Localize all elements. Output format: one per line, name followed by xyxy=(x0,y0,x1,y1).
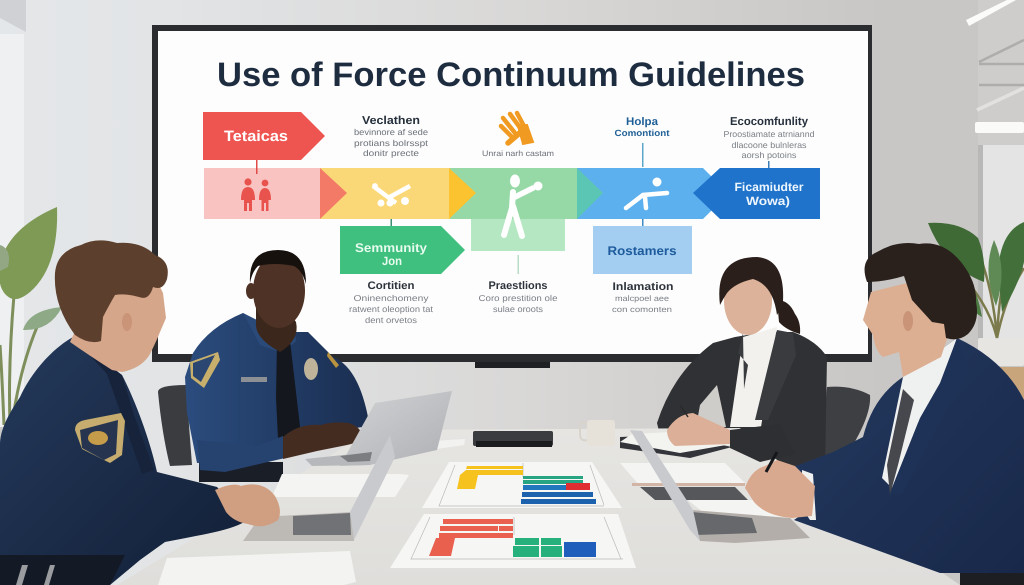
text block: Praestlions: sulae oroots xyxy=(493,304,543,314)
arrow: Tetaicas: Tetaicas xyxy=(224,128,288,145)
chair: centre officer xyxy=(158,385,192,466)
document chart: bottom xyxy=(390,514,636,568)
stacked documents right xyxy=(433,439,790,518)
table xyxy=(117,428,960,585)
sleeve and hands: woman xyxy=(667,405,795,462)
text block: Cortitien xyxy=(349,280,434,325)
forearm and hands: centre officer xyxy=(197,422,363,472)
text block: Cortitien: Oninenchomeny xyxy=(354,293,429,303)
text block: Inlamation: Inlamation xyxy=(612,281,674,293)
arrow: Ficamiudter Wowa: Wowa) xyxy=(746,194,790,208)
box: Rostamers: Rostamers xyxy=(608,244,677,258)
continuum band xyxy=(204,168,722,219)
text block: Cortitien: ratwent oleoption tat xyxy=(349,304,434,314)
laptop: front left xyxy=(243,435,395,541)
icon: walking figure xyxy=(504,175,542,236)
arrow: Semmunity Jon xyxy=(340,219,465,274)
person: woman xyxy=(657,257,827,475)
person: left officer xyxy=(0,240,280,585)
text block: Praestlions xyxy=(478,280,558,314)
notebook xyxy=(473,431,553,447)
chair: woman xyxy=(820,387,870,465)
ceiling lights xyxy=(966,0,1024,133)
document chart: top xyxy=(422,462,622,508)
text block: Veclathen: donitr precte xyxy=(363,148,419,158)
plant: left xyxy=(0,207,62,450)
text block: Inlamation: malcpoel aee xyxy=(615,294,670,303)
text block: Holpa Comontiont xyxy=(614,116,670,167)
person: right man xyxy=(745,243,1024,585)
text block: Inlamation: con comonten xyxy=(612,305,672,314)
notebook: woman xyxy=(620,432,732,458)
caption: hands: Unrai narh castam xyxy=(482,149,554,158)
text block: Praestlions: Coro prestition ole xyxy=(478,293,558,303)
arrow: Tetaicas xyxy=(203,112,325,174)
text block: Cortitien: dent orvetos xyxy=(365,315,417,325)
icon: two people xyxy=(241,178,271,211)
loose papers left xyxy=(272,474,409,497)
title: Use of Force Continuum Guidelines xyxy=(217,56,805,94)
text block: Veclathen: protians bolrsspt xyxy=(354,138,429,148)
arrow: Ficamiudter Wowa: Ficamiudter xyxy=(734,180,804,194)
box: Rostamers xyxy=(593,219,692,274)
coffee mug xyxy=(580,420,615,446)
green lower box xyxy=(471,219,565,274)
text block: Holpa Comontiont: Comontiont xyxy=(614,128,670,138)
text block: Veclathen xyxy=(354,115,429,158)
text block: Ecocomfunlity: Ecocomfunlity xyxy=(730,116,809,128)
text block: Ecocomfunlity: aorsh potoins xyxy=(742,150,796,160)
icon: orange hands xyxy=(501,113,533,144)
wall screen xyxy=(152,25,872,368)
person: centre officer xyxy=(185,250,368,482)
text block: Praestlions: Praestlions xyxy=(488,280,548,292)
laptop: front right xyxy=(630,430,810,543)
text block: Veclathen: bevinnore af sede xyxy=(354,127,428,137)
sheet front xyxy=(158,551,356,585)
text block: Cortitien: Cortitien xyxy=(368,280,415,292)
text block: Inlamation xyxy=(612,281,674,314)
text block: Ecocomfunlity: dlacoone bulnleras xyxy=(732,140,806,150)
icon: lunging figure xyxy=(626,178,667,208)
laptop: back centre xyxy=(305,391,452,466)
arrow: Ficamiudter Wowa xyxy=(693,168,820,219)
text block: Holpa Comontiont: Holpa xyxy=(626,116,659,128)
text block: Ecocomfunlity: Proostiamate atrniannd xyxy=(724,129,815,139)
arrow: Semmunity Jon: Jon xyxy=(382,254,402,268)
text block: Veclathen: Veclathen xyxy=(362,115,420,127)
arrow: Semmunity Jon: Semmunity xyxy=(355,241,427,255)
plant: right xyxy=(928,222,1024,366)
icon: crossed batons xyxy=(373,184,410,206)
text block: Ecocomfunlity xyxy=(724,116,815,168)
